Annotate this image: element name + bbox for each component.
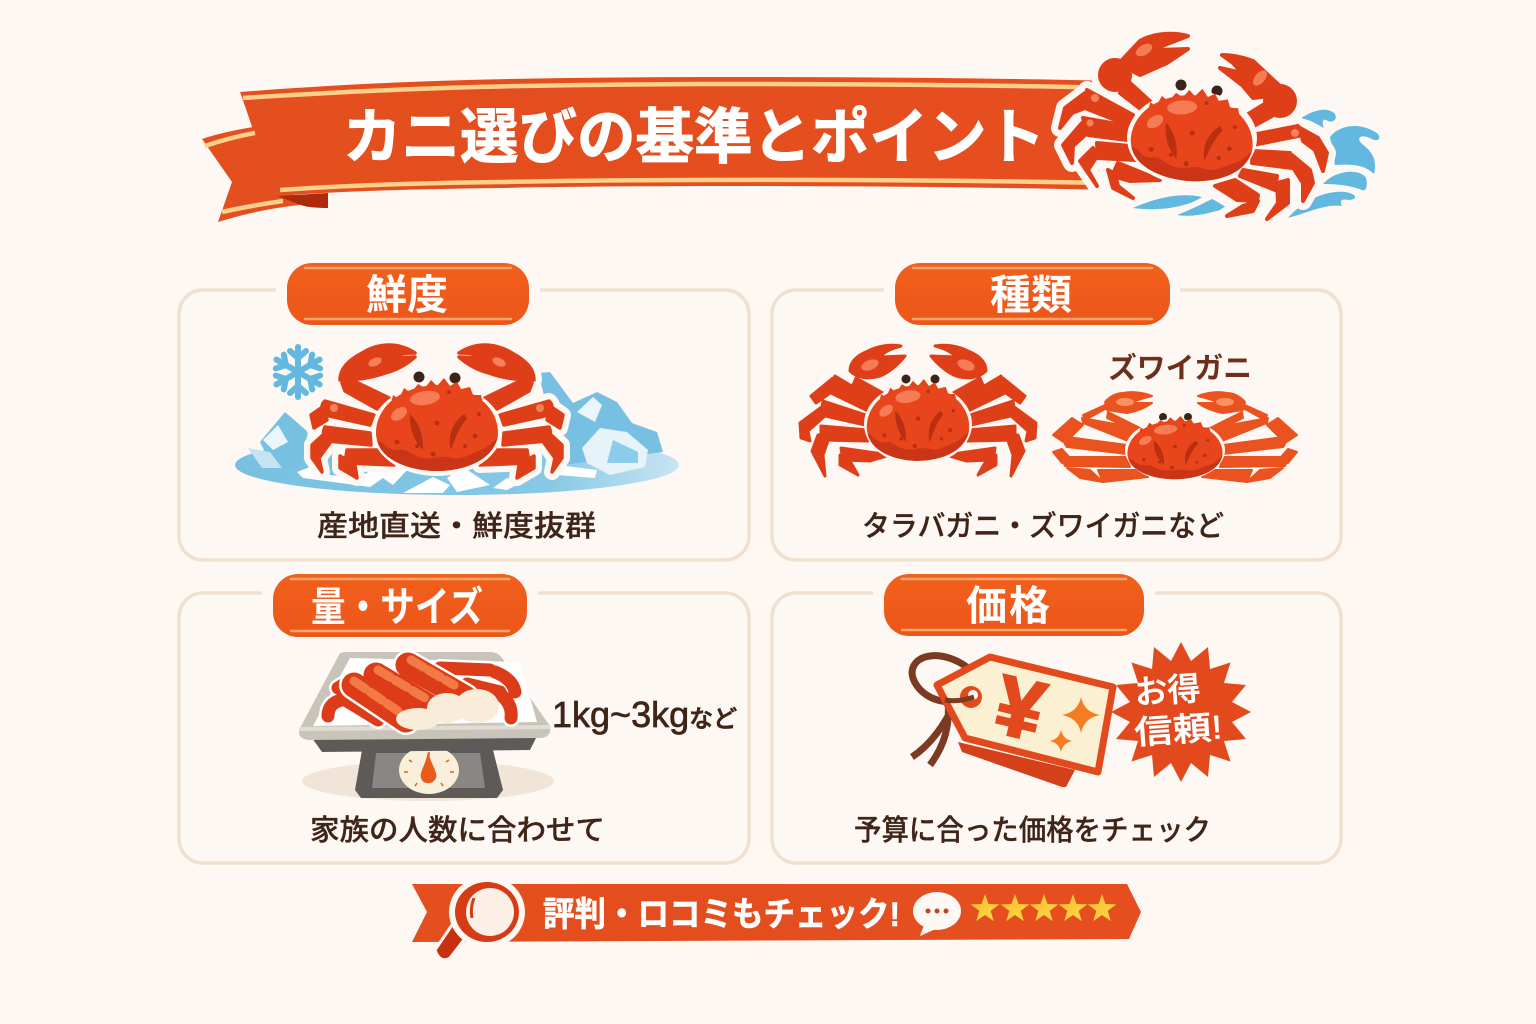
pill heading: 種類: [990, 272, 1072, 318]
starburst badge: [1111, 642, 1251, 782]
ribbon: [412, 884, 1141, 942]
crab: [311, 345, 563, 478]
snow and ice shards: [297, 462, 597, 493]
pill heading: 価格: [966, 583, 1050, 629]
caption: 産地直送・鮮度抜群: [317, 510, 596, 543]
tray rim: [301, 727, 549, 729]
tag back: [958, 742, 1075, 787]
crab: [1060, 34, 1327, 219]
caption: 予算に合った価格をチェック: [854, 814, 1211, 847]
pill heading: 鮮度: [366, 272, 448, 318]
caption: 家族の人数に合わせて: [310, 814, 605, 847]
sparkles: [1062, 697, 1100, 733]
ribbon main body: [240, 77, 1110, 196]
caption: タラバガニ・ズワイガニなど: [862, 510, 1224, 543]
starburst badge: 信頼!: [1133, 708, 1223, 751]
panel: 鮮度: [179, 263, 749, 560]
banner text: 評判・ロコミもチェック!: [543, 896, 900, 934]
bottom banner: [412, 876, 1141, 960]
ice chunks: [260, 412, 308, 468]
label: weight: 1kg~3kgなど: [552, 694, 737, 735]
pill heading: [884, 574, 1144, 636]
panel frame: [179, 290, 749, 560]
tag hole: [960, 686, 982, 708]
tag front: [937, 657, 1113, 772]
panel frame: [179, 593, 749, 863]
icon: taraba crab: [800, 345, 1036, 476]
pill heading: [273, 574, 527, 637]
icon: snowflake: [272, 347, 324, 397]
icon: top crab with waves: [1060, 34, 1379, 219]
icon: crab on ice: [235, 345, 679, 495]
icon: magnifying glass: [435, 876, 525, 960]
panel frame: [772, 593, 1341, 863]
ribbon left tail: [202, 127, 300, 222]
scale shadow: [302, 761, 554, 801]
tray: [299, 652, 550, 740]
tray paper: [313, 658, 537, 726]
icon: scale with crab legs: [299, 652, 554, 801]
panel: 種類: [772, 263, 1341, 560]
panel: 量・サイズ: [179, 574, 749, 863]
yen sign: ¥: [986, 657, 1053, 759]
ribbon fold: [278, 193, 328, 208]
panel frame: [772, 290, 1341, 560]
title banner: [202, 77, 1110, 222]
ribbon trim lines: [205, 84, 1110, 212]
icon: price tag: [912, 656, 1113, 787]
pill heading: [895, 263, 1170, 325]
panel: 価格: [772, 574, 1341, 863]
tray underside: [312, 738, 536, 752]
crab legs: [328, 660, 515, 720]
dial: [399, 746, 459, 794]
waves: [1133, 110, 1379, 218]
icon: speech bubble: [913, 892, 961, 936]
pill heading: 量・サイズ: [311, 584, 483, 630]
pill heading: [287, 263, 529, 325]
scale stand: [355, 750, 503, 798]
ice plate: [235, 435, 679, 495]
crab meat: [396, 689, 499, 730]
five stars: [971, 894, 1116, 921]
tag string: [912, 656, 968, 765]
starburst badge: お得: [1133, 670, 1202, 711]
icon: zuwai crab: [1053, 392, 1297, 482]
title text: カニ選びの基準とポイント: [343, 104, 1045, 171]
label: ズワイガニ: ズワイガニ: [1108, 351, 1252, 385]
